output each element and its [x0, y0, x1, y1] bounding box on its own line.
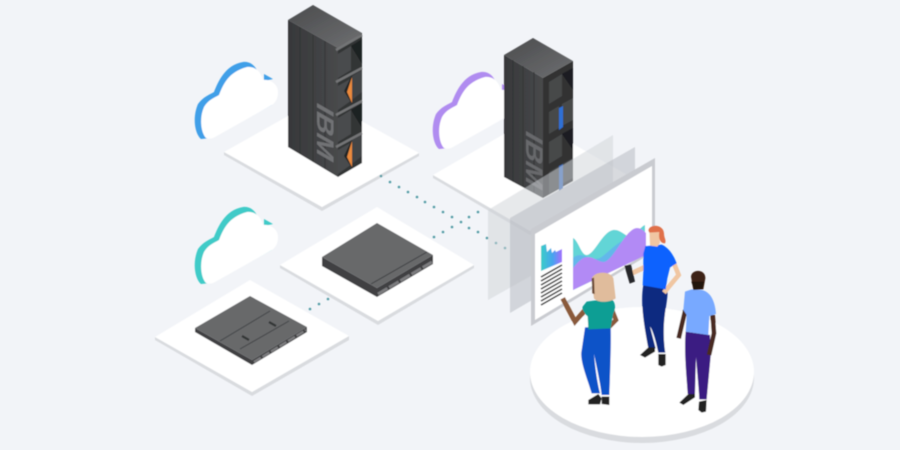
server rack: orange accent: [288, 5, 362, 177]
person: woman with teal top: [563, 273, 616, 405]
people: [563, 226, 716, 413]
area chart: [573, 225, 646, 290]
platform: middle: [280, 207, 474, 325]
person: woman with blue top: [624, 226, 679, 367]
platform: lower left: [155, 280, 349, 396]
person: man with light blue top: [679, 271, 716, 413]
platform: top left: [224, 98, 419, 211]
connection dots: [309, 175, 506, 310]
server: middle: [322, 223, 433, 297]
cloud: blue: [195, 62, 278, 139]
platform: top right: [433, 119, 627, 235]
presentation screen: [531, 158, 655, 326]
glass panel: back: [488, 135, 613, 300]
server rack: blue accent: [504, 38, 573, 198]
text lines: [541, 265, 562, 305]
cloud: teal: [195, 207, 278, 284]
cloud: purple: [433, 72, 516, 149]
logo: IBM on rack two: IBM: [520, 126, 546, 195]
glass panel: middle: [510, 147, 635, 313]
round platform: [530, 307, 754, 443]
bar chart: [541, 244, 562, 271]
logo: IBM on rack one: IBM: [311, 98, 337, 167]
server: lower left: [195, 296, 307, 365]
